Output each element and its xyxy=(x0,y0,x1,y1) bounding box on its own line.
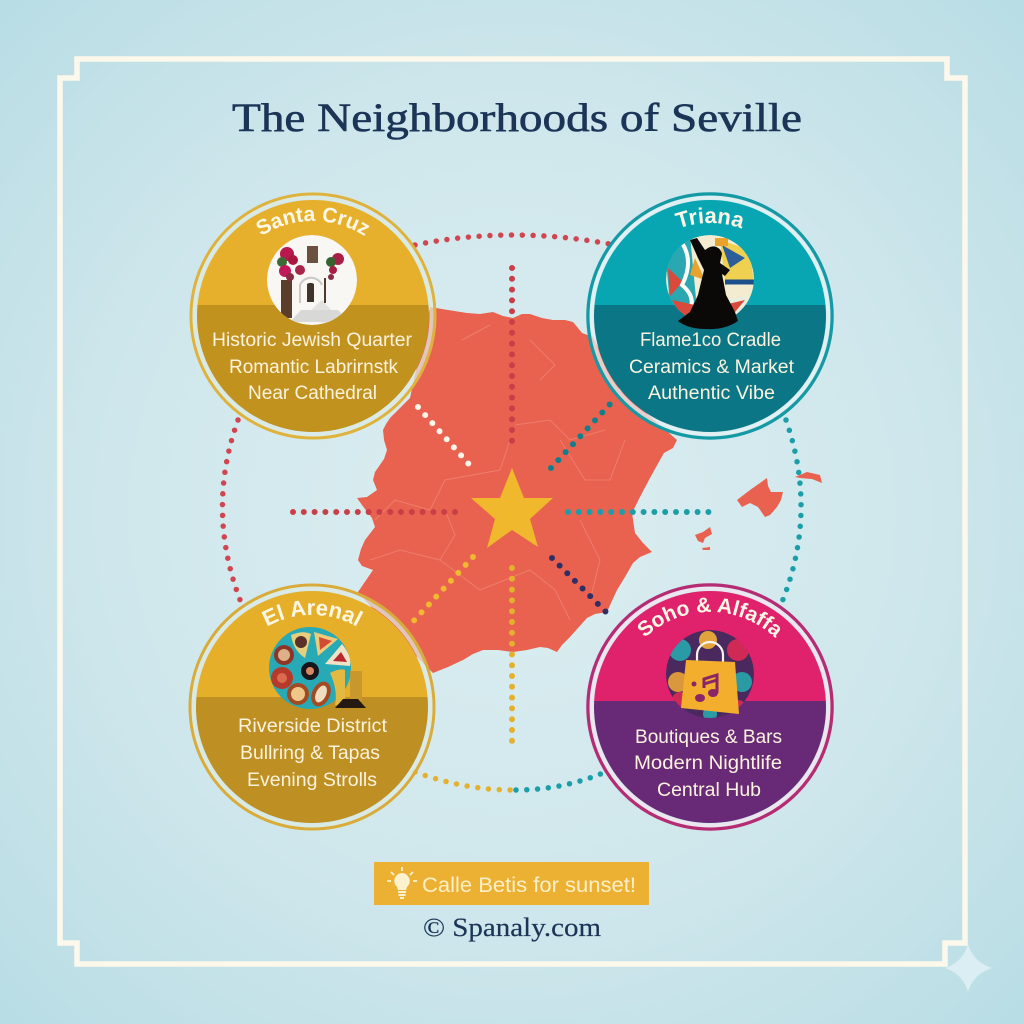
text: Triana details: Authentic Vibe xyxy=(648,383,775,404)
text: El Arenal details: Riverside District xyxy=(238,716,388,737)
icon: central star xyxy=(471,468,553,548)
text: El Arenal details: Evening Strolls xyxy=(247,770,377,791)
title: The Neighborhoods of Seville xyxy=(232,95,802,140)
region borders xyxy=(370,325,625,620)
text: Triana details: Ceramics & Market xyxy=(629,357,795,378)
icon: shopping bag with music note xyxy=(666,630,754,721)
heading: Santa Cruz: Santa Cruz xyxy=(256,208,370,236)
icon: light bulb xyxy=(387,867,417,899)
text: El Arenal details xyxy=(238,716,388,791)
text: Soho & Alfaffa details: Boutiques & Bars xyxy=(635,727,782,748)
decorative frame xyxy=(60,59,965,964)
text: Soho & Alfaffa details: Modern Nightlife xyxy=(634,753,782,774)
panel: Santa Cruz xyxy=(190,192,436,440)
text: Santa Cruz details: Romantic Labrirnstk xyxy=(229,357,398,378)
text: Soho & Alfaffa details xyxy=(634,727,782,801)
heading: El Arenal: El Arenal xyxy=(262,600,364,626)
mainland xyxy=(357,307,677,673)
dotted spokes xyxy=(293,268,712,745)
text: Santa Cruz details: Historic Jewish Quarter xyxy=(212,330,413,351)
icon: tapas plate and tower xyxy=(269,627,366,710)
map of Spain xyxy=(357,307,822,673)
icon: corner sparkle xyxy=(945,944,992,992)
tip text: Calle Betis for sunset! xyxy=(422,874,636,897)
panel: Triana xyxy=(586,192,834,440)
text: Soho & Alfaffa details: Central Hub xyxy=(657,780,761,801)
islands xyxy=(737,478,783,517)
icon: flamenco dancer on tile xyxy=(666,235,756,329)
icon: white street photo xyxy=(267,235,357,325)
copyright: © Spanaly.com xyxy=(423,913,601,942)
panel: Soho & Alfaffa xyxy=(586,583,834,831)
text: Santa Cruz details: Near Cathedral xyxy=(248,383,377,404)
text: Santa Cruz details xyxy=(212,330,413,404)
heading: Soho & Alfaffa: Soho & Alfaffa xyxy=(638,598,780,638)
text: El Arenal details: Bullring & Tapas xyxy=(240,743,380,764)
text: Triana details xyxy=(629,330,795,404)
panel: El Arenal xyxy=(188,584,436,830)
dotted orbit ring xyxy=(222,235,801,790)
callout: sunset tip xyxy=(374,862,649,905)
text: Triana details: Flame1co Cradle xyxy=(640,330,781,351)
heading: Triana: Triana xyxy=(674,207,743,228)
